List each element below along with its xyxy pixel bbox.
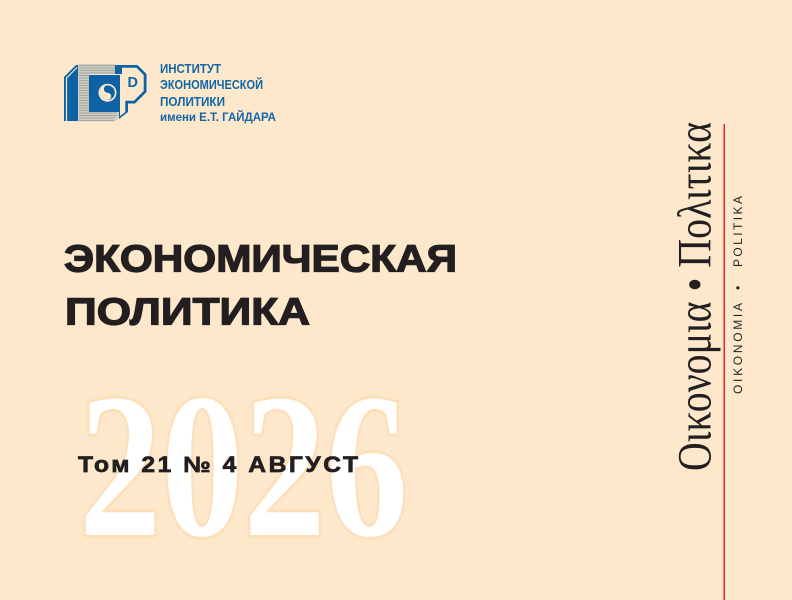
latin subtitle: OIKONOMIA bbox=[731, 303, 745, 394]
logo: institute emblem bbox=[64, 64, 146, 122]
title: ПОЛИТИКА bbox=[65, 292, 310, 334]
year 2026: 2026 bbox=[79, 351, 408, 580]
issue line: Том 21 № 4 АВГУСТ bbox=[78, 452, 359, 477]
institute name: ИНСТИТУТ bbox=[160, 61, 221, 76]
title bbox=[64, 238, 457, 334]
latin subtitle bbox=[731, 196, 745, 394]
institute name: имени Е.Т. ГАЙДАРА bbox=[160, 109, 276, 124]
institute name: ПОЛИТИКИ bbox=[160, 94, 225, 109]
title: ЭКОНОМИЧЕСКАЯ bbox=[64, 238, 457, 280]
red vertical rule bbox=[724, 124, 725, 600]
institute name: ЭКОНОМИЧЕСКОЙ bbox=[160, 77, 263, 92]
greek title: Οικονομια • Πολιτικα bbox=[668, 122, 722, 471]
latin subtitle: POLITIKA bbox=[731, 196, 745, 267]
logo letter D: D bbox=[128, 75, 138, 91]
latin subtitle: • bbox=[731, 286, 745, 290]
institute name bbox=[160, 61, 276, 124]
